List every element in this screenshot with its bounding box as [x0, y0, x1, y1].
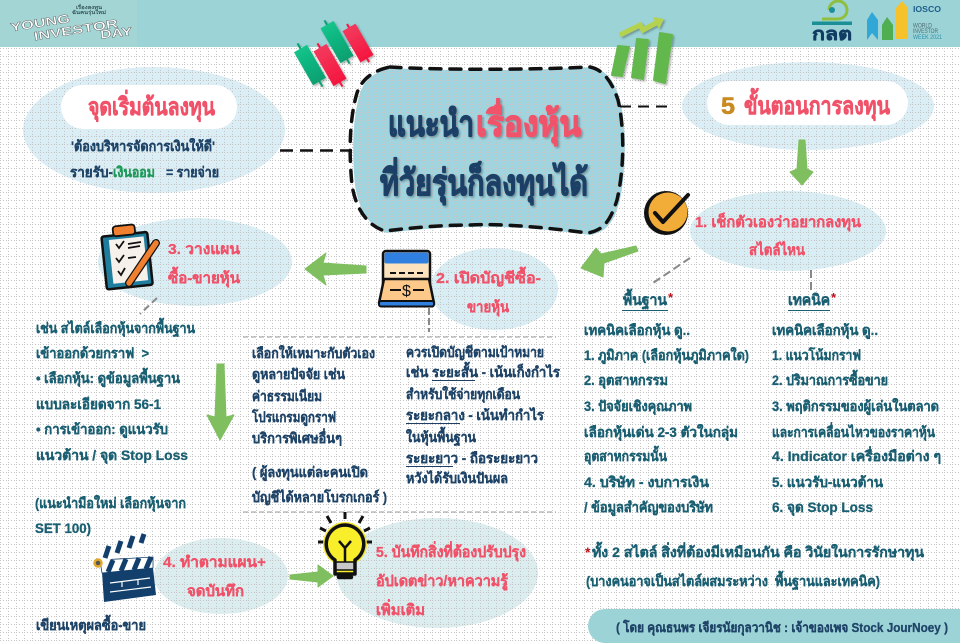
title: เรื่องหุ้น — [476, 98, 581, 147]
logo: Young Investor Day: ฉันคนรุ่นใหม่ — [72, 9, 106, 16]
text: step 1 — [695, 212, 862, 259]
arrow: step 3 to step 4 — [207, 364, 234, 440]
text: manage money: = รายจ่าย — [166, 164, 219, 180]
text: broker selection: บัญชีได้หลายโบรกเกอร์ ) — [252, 488, 387, 506]
text: technical list: เทคนิคเลือกหุ้น ดู.. — [772, 322, 878, 339]
text: step 3: ซื้อ-ขายหุ้น — [168, 266, 241, 288]
text: step 5: เพิ่มเติม — [376, 599, 425, 619]
heading: fundamental: พื้นฐาน — [623, 288, 668, 310]
text: technical list — [772, 322, 941, 516]
pill: five steps heading: ขั้นตอนการลงทุน — [744, 87, 890, 122]
header band — [0, 0, 960, 47]
note: both styles — [585, 541, 924, 591]
text: account goals: หวังได้รับเงินปันผล — [406, 469, 508, 486]
panel: step 2 ellipse — [430, 248, 558, 330]
icon: bank book: $ — [402, 283, 411, 300]
logo: World Investor Week 2021: INVESTOR — [913, 29, 939, 35]
icon: clapperboard — [94, 533, 156, 602]
text: manage money: 'ต้องบริหารจัดการเงินให้ดี' — [71, 137, 215, 154]
text: fundamental list: 3. ปัจจัยเชิงคุณภาพ — [584, 398, 692, 415]
text: technical list: 1. แนวโน้มกราฟ — [772, 346, 861, 363]
text: step 3 details: (แนะนำมือใหม่ เลือกหุ้นจาก — [35, 494, 186, 512]
panel: start investing ellipse — [23, 67, 285, 193]
note: both styles: (บางคนอาจเป็นสไตล์ผสมระหว่าง พื้นฐานและเทคนิค) — [586, 570, 880, 591]
text: step 4 — [163, 554, 266, 600]
text: step 1: 1. เช็กตัวเองว่าอยากลงทุน — [695, 212, 862, 232]
panel: five steps ellipse — [682, 62, 934, 150]
logo: Young Investor Day — [0, 0, 137, 47]
pill: start investing heading: จุดเริ่มต้นลงทุน — [88, 89, 215, 123]
text: broker selection: บริการพิเศษอื่นๆ — [252, 428, 342, 446]
text: account goals: ควรเปิดบัญชีตามเป้าหมาย — [406, 344, 544, 361]
connectors: step 1 dashes — [650, 258, 811, 290]
text: step 3 details: เช่น สไตล์เลือกหุ้นจากพื้นฐาน — [36, 317, 195, 338]
logo: World Investor Week 2021: IOSCO — [913, 5, 941, 14]
text: account goals: ระยะกลาง - เน้นทำกำไร — [406, 406, 544, 423]
arrow: step 1 to step 2 — [581, 246, 638, 277]
text: broker selection — [251, 344, 387, 506]
title: แนะนำ — [388, 103, 474, 144]
text: fundamental list: / ข้อมูลสำคัญของบริษัท — [584, 499, 713, 516]
icon: bank book — [379, 251, 434, 306]
panel: step 4 ellipse — [154, 538, 288, 614]
text: manage money: รายรับ- — [70, 164, 113, 180]
text: step 1: สไตล์ไหน — [749, 240, 806, 259]
panel: central title blob — [353, 67, 625, 235]
title — [380, 98, 588, 206]
heading: technical: เทคนิค — [788, 291, 830, 309]
text: step 3 details: แบบละเอียดจาก 56-1 — [36, 396, 161, 412]
note: both styles: * — [585, 544, 591, 560]
panel: step 3 ellipse — [98, 218, 292, 306]
text: account goals: ระยะยาว - ถือระยะยาว — [406, 450, 538, 466]
text: technical list: 5. แนวรับ-แนวต้าน — [772, 474, 883, 490]
text: broker selection: ค่าธรรมเนียม — [252, 388, 322, 404]
panel: step 5 ellipse — [336, 518, 538, 628]
text: step 2 — [436, 266, 541, 317]
logo: World Investor Week 2021 — [867, 1, 943, 41]
text: step 3 — [168, 241, 241, 288]
logo: Young Investor Day: YOUNG — [9, 11, 71, 35]
text: technical list: และการเคลื่อนไหวของราคาหุ้น — [772, 422, 935, 441]
connector dashes right — [620, 106, 672, 108]
connector dashes left — [280, 149, 352, 152]
logo: Young Investor Day: DAY — [99, 24, 133, 42]
text: broker selection: ( ผู้ลงทุนแต่ละคนเปิด — [252, 464, 368, 481]
arrow: step 4 to step 5 — [290, 565, 333, 587]
icon: clipboard — [101, 224, 156, 289]
logo: Young Investor Day: INVESTOR — [33, 16, 119, 43]
text: step 3 details: SET 100) — [35, 520, 91, 536]
icon: candlesticks — [291, 17, 375, 90]
footer credit — [588, 609, 960, 643]
text: technical list: 4. Indicator เครื่องมือต่าง ๆ — [772, 446, 941, 464]
logo: SEC Thailand: กลต — [812, 24, 852, 44]
text: account goals: ในหุ้นพื้นฐาน — [406, 426, 476, 447]
connector: step 2 to details — [428, 308, 430, 332]
text: step 4: 4. ทำตามแผน+ — [163, 554, 266, 571]
text: step 5 — [376, 541, 526, 619]
text: step 3 details: เข้าออกด้วยกราฟ > — [36, 345, 149, 361]
text: fundamental list: 2. อุตสาหกรรม — [584, 372, 668, 389]
text: step 5: อัปเดตข่าว/หาความรู้ — [376, 573, 509, 591]
text: broker selection: โปรแกรมดูกราฟ — [251, 408, 336, 426]
logo: World Investor Week 2021: WORLD — [913, 24, 933, 30]
text: broker selection: เลือกให้เหมาะกับตัวเอง — [252, 344, 375, 361]
note: both styles: ทั้ง 2 สไตล์ สิ่งที่ต้องมีเหมือนกัน คือ วินัยในการรักษาทุน — [592, 541, 924, 561]
text: fundamental list: เลือกหุ้นเด่น 2-3 ตัวในกลุ่ม — [584, 423, 738, 441]
text: account goals: สำหรับใช้จ่ายทุกเดือน — [406, 385, 520, 403]
connector: step 3 dashes — [140, 298, 157, 314]
text: step 3 details: • การเข้าออก: ดูแนวรับ — [36, 421, 168, 438]
heading: fundamental: * — [668, 290, 674, 305]
text: manage money: เงินออม — [113, 164, 155, 180]
icon: rising bars — [612, 17, 672, 83]
text: fundamental list: เทคนิคเลือกหุ้น ดู.. — [584, 322, 690, 339]
text: step 4: จดบันทึก — [187, 582, 244, 600]
text: technical list: 3. พฤติกรรมของผู้เล่นในตลาด — [772, 397, 939, 415]
arrow: step 2 to step 3 — [305, 253, 366, 285]
text: step 3 details: แนวต้าน / จุด Stop Loss — [36, 447, 188, 464]
logo: World Investor Week 2021: WEEK 2021 — [913, 35, 943, 41]
text: account goals — [406, 344, 560, 486]
text: fundamental list: อุตสาหกรรมนั้น — [584, 445, 667, 465]
text: step 3 details: • เลือกหุ้น: ดูข้อมูลพื้นฐาน — [36, 367, 180, 388]
text: broker selection: ดูหลายปัจจัย เช่น — [252, 366, 345, 383]
text: fundamental list — [584, 322, 749, 516]
pill: five steps heading: 5 — [721, 93, 735, 120]
text: technical list: 6. จุด Stop Loss — [772, 499, 873, 516]
icon: light bulb — [318, 512, 372, 577]
arrow: down to step 1 — [790, 140, 813, 185]
heading: fundamental — [622, 288, 674, 310]
text: technical list: 2. ปริมาณการซื้อขาย — [772, 369, 888, 388]
central title border — [350, 67, 623, 233]
logo: SEC Thailand — [812, 1, 852, 44]
text: step 2: ขายหุ้น — [467, 299, 510, 317]
icon: check mark — [644, 191, 688, 235]
pill: start investing heading — [61, 85, 237, 129]
title: ที่วัยรุ่นก็ลงทุนได้ — [380, 157, 588, 206]
text: step 3: 3. วางแผน — [168, 241, 241, 258]
text: step 3 details — [35, 317, 195, 536]
heading: technical: * — [831, 290, 837, 305]
text: step 2: 2. เปิดบัญชีซื้อ- — [436, 266, 541, 287]
logo: Young Investor Day: เรื่องลงทุน — [76, 3, 103, 11]
pill: five steps heading — [707, 81, 908, 125]
text: manage money — [70, 137, 219, 180]
text: step 5: 5. บันทึกสิ่งที่ต้องปรับปรุง — [376, 541, 526, 562]
text: write reasons: เขียนเหตุผลซื้อ-ขาย — [36, 614, 146, 634]
panel: step 1 ellipse — [690, 191, 886, 271]
text: fundamental list: 4. บริษัท - งบการเงิน — [584, 474, 709, 490]
text: account goals: เช่น ระยะสั้น - เน้นเก็งกำไร — [406, 361, 560, 380]
text: fundamental list: 1. ภูมิภาค (เลือกหุ้นภูมิภาคใด) — [584, 346, 749, 364]
